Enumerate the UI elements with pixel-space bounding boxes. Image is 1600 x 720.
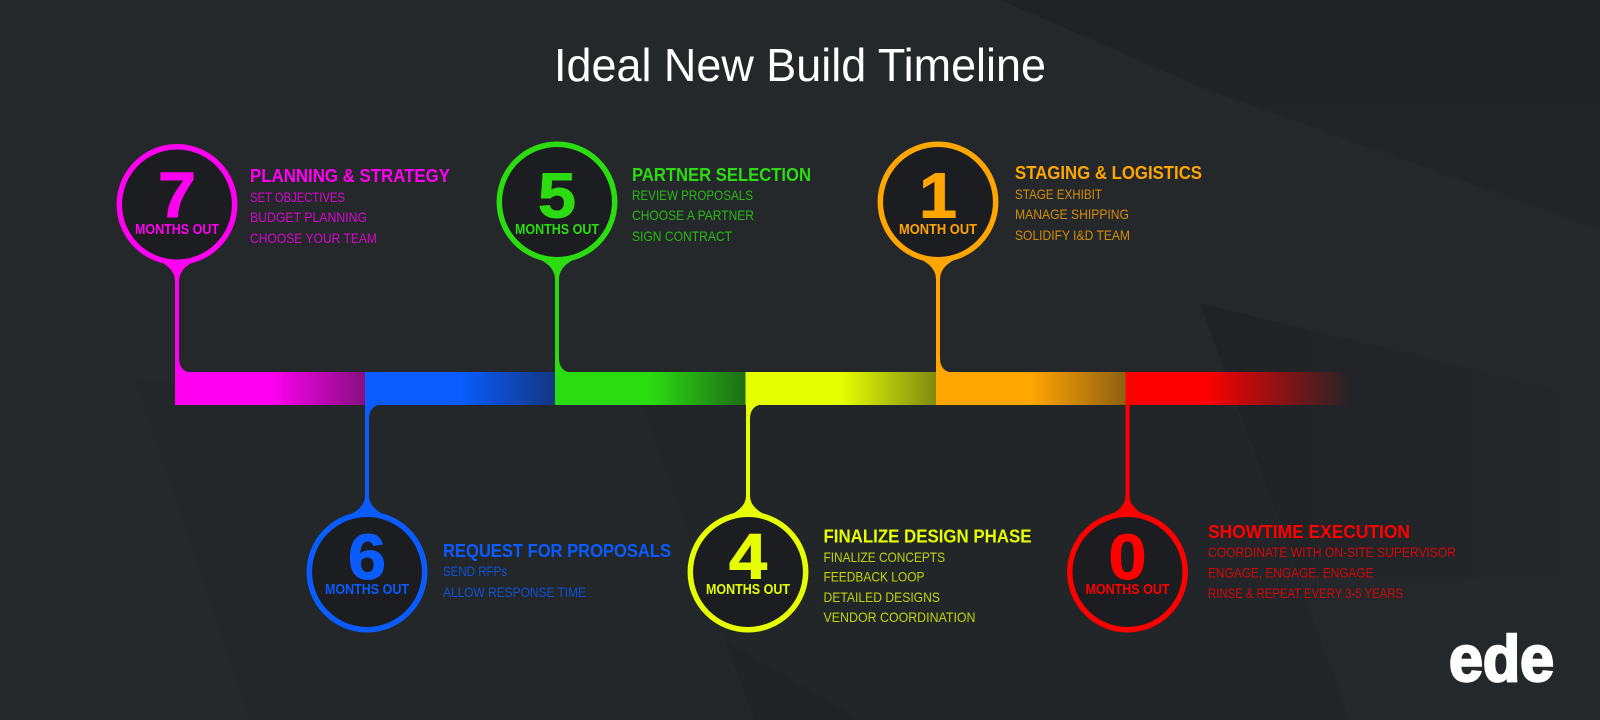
- marker: 0 months out: [1070, 404, 1185, 630]
- timeline bar: [175, 372, 1350, 405]
- text: showtime execution: SHOWTIME EXECUTION: [1208, 522, 1410, 542]
- panel: step 7 months out: [119, 147, 450, 373]
- panel: step 0 months out: [1070, 404, 1456, 630]
- panel: step 6 months out: [309, 404, 671, 630]
- text: request for proposals: ALLOW RESPONSE TIME: [443, 584, 586, 600]
- marker: 4 months out: MONTHS OUT: [706, 582, 790, 598]
- title: Ideal New Build Timeline: [554, 39, 1046, 91]
- text: request for proposals: [443, 541, 671, 600]
- marker: 1 month out: [880, 144, 996, 373]
- text: finalize design phase: FEEDBACK LOOP: [824, 568, 924, 584]
- text: finalize design phase: FINALIZE CONCEPTS: [824, 549, 945, 565]
- text: planning and strategy: BUDGET PLANNING: [250, 209, 367, 225]
- text: finalize design phase: [824, 526, 1032, 625]
- text: staging and logistics: MANAGE SHIPPING: [1015, 206, 1129, 222]
- text: staging and logistics: STAGING & LOGISTICS: [1015, 163, 1202, 183]
- marker: 5 months out: 5: [538, 160, 576, 232]
- text: request for proposals: REQUEST FOR PROPOSALS: [443, 541, 671, 561]
- text: showtime execution: [1208, 522, 1456, 601]
- text: finalize design phase: VENDOR COORDINATION: [824, 609, 976, 625]
- marker: 7 months out: [119, 147, 235, 373]
- text: planning and strategy: PLANNING & STRATEGY: [250, 166, 450, 186]
- text: showtime execution: COORDINATE WITH ON-SITE SUPERVISOR: [1208, 544, 1456, 560]
- text: partner selection: REVIEW PROPOSALS: [632, 187, 753, 203]
- marker: 6 months out: MONTHS OUT: [325, 582, 409, 598]
- panel: step 4 months out: [690, 404, 1032, 630]
- text: partner selection: [632, 165, 811, 244]
- marker: 6 months out: [309, 404, 425, 630]
- text: showtime execution: RINSE & REPEAT EVERY 3-5 YEARS: [1208, 585, 1403, 601]
- logo: ede: ede: [1449, 622, 1554, 695]
- marker: 0 months out: MONTHS OUT: [1086, 582, 1170, 598]
- marker: 0 months out: 0: [1108, 521, 1146, 593]
- panel: step 5 months out: [499, 144, 811, 373]
- text: finalize design phase: DETAILED DESIGNS: [824, 589, 940, 605]
- text: planning and strategy: CHOOSE YOUR TEAM: [250, 230, 377, 246]
- panel: step 1 month out: [880, 144, 1202, 373]
- marker: 1 month out: MONTH OUT: [899, 222, 977, 238]
- marker: 7 months out: 7: [158, 159, 196, 231]
- marker: 6 months out: 6: [348, 521, 386, 593]
- text: staging and logistics: [1015, 163, 1202, 243]
- marker: 7 months out: MONTHS OUT: [135, 222, 219, 238]
- text: staging and logistics: STAGE EXHIBIT: [1015, 186, 1102, 202]
- text: partner selection: PARTNER SELECTION: [632, 165, 811, 185]
- text: showtime execution: ENGAGE, ENGAGE, ENGAGE: [1208, 564, 1374, 580]
- marker: 4 months out: [690, 404, 806, 630]
- marker: 5 months out: [499, 144, 615, 373]
- text: planning and strategy: SET OBJECTIVES: [250, 189, 345, 205]
- marker: 5 months out: MONTHS OUT: [515, 222, 599, 238]
- text: planning and strategy: [250, 166, 450, 246]
- marker: 1 month out: 1: [919, 160, 957, 232]
- text: finalize design phase: FINALIZE DESIGN PHASE: [824, 526, 1032, 546]
- text: staging and logistics: SOLIDIFY I&D TEAM: [1015, 227, 1130, 243]
- marker: 4 months out: 4: [729, 520, 767, 592]
- text: partner selection: CHOOSE A PARTNER: [632, 207, 754, 223]
- text: partner selection: SIGN CONTRACT: [632, 228, 732, 244]
- text: request for proposals: SEND RFPs: [443, 563, 507, 579]
